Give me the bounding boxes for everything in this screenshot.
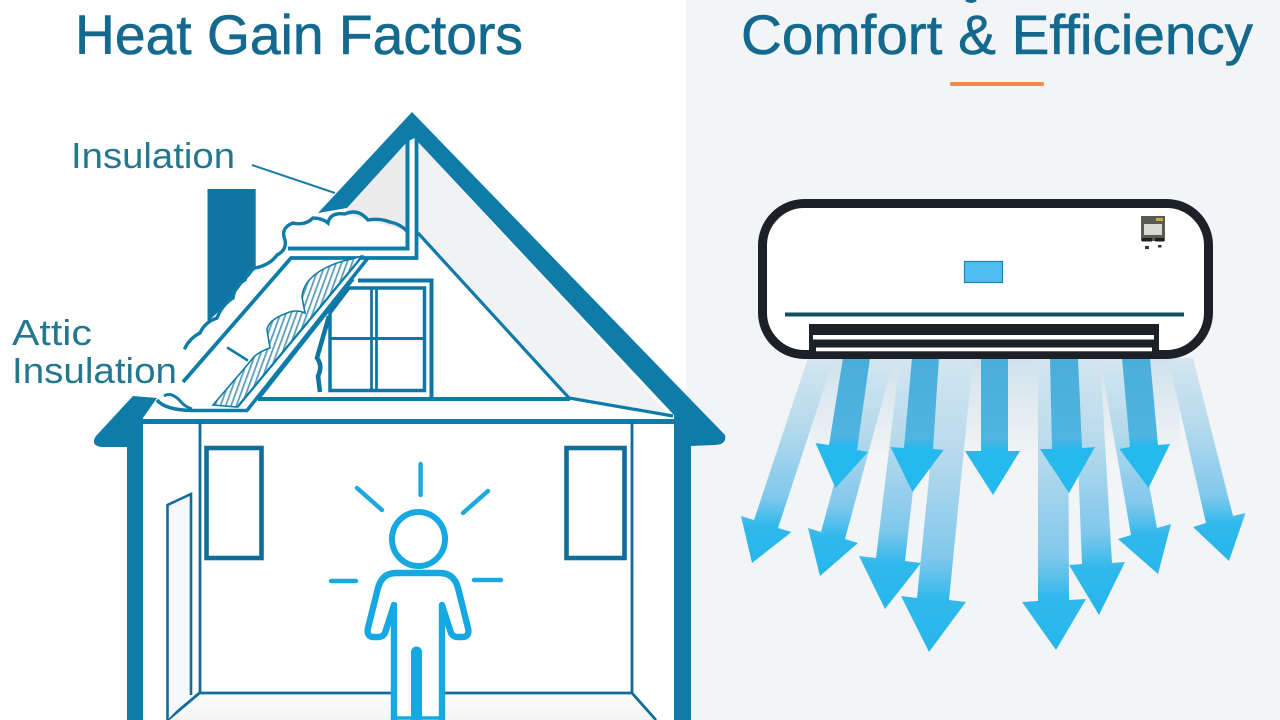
control sticker [1141,216,1165,249]
heading: heat gain factors: Heat Gain Factors [75,3,523,66]
label: attic insulation: Attic [12,312,92,353]
door [168,494,191,720]
roof [94,112,725,720]
gable left shading [320,142,407,250]
chimney [208,189,256,322]
interior wall lines [168,422,656,720]
hanging cable [317,316,329,392]
panel: comfort and efficiency [741,0,1253,652]
vent [809,324,1159,356]
attic insulation fill [183,214,407,382]
airflow arrows [741,358,1246,652]
person head [392,512,445,566]
right window [566,448,624,558]
air haze [810,358,1180,458]
front arrows [816,358,1170,495]
person leg divider [411,652,422,720]
label: insulation: Insulation [71,135,235,176]
attic window [330,280,432,397]
attic structure lines [143,134,674,422]
cut-off heading descender [966,0,976,2]
label: attic insulation [12,312,177,391]
heading: comfort and efficiency: Comfort & Efficiency [741,3,1253,66]
unit body [762,204,1208,354]
attic gable shading [418,142,668,414]
house illustration [94,112,725,720]
panel: heat gain factors [12,3,725,720]
person body [368,573,468,720]
insulation strap [228,348,247,360]
left window [206,448,262,558]
status display [964,262,1002,282]
person with heat rays [331,464,501,720]
back arrows [741,358,1246,652]
panel: right background [686,0,1280,720]
front line [785,312,1184,316]
insulation cloud outline [185,212,407,348]
floor shading [168,693,656,720]
person feet [394,716,442,720]
air conditioner unit [762,204,1208,356]
label: attic insulation: Insulation [12,350,177,391]
loose insulation hatching [213,256,362,407]
leader line [252,165,335,193]
orange divider [950,82,1044,86]
heat rays [331,464,501,581]
